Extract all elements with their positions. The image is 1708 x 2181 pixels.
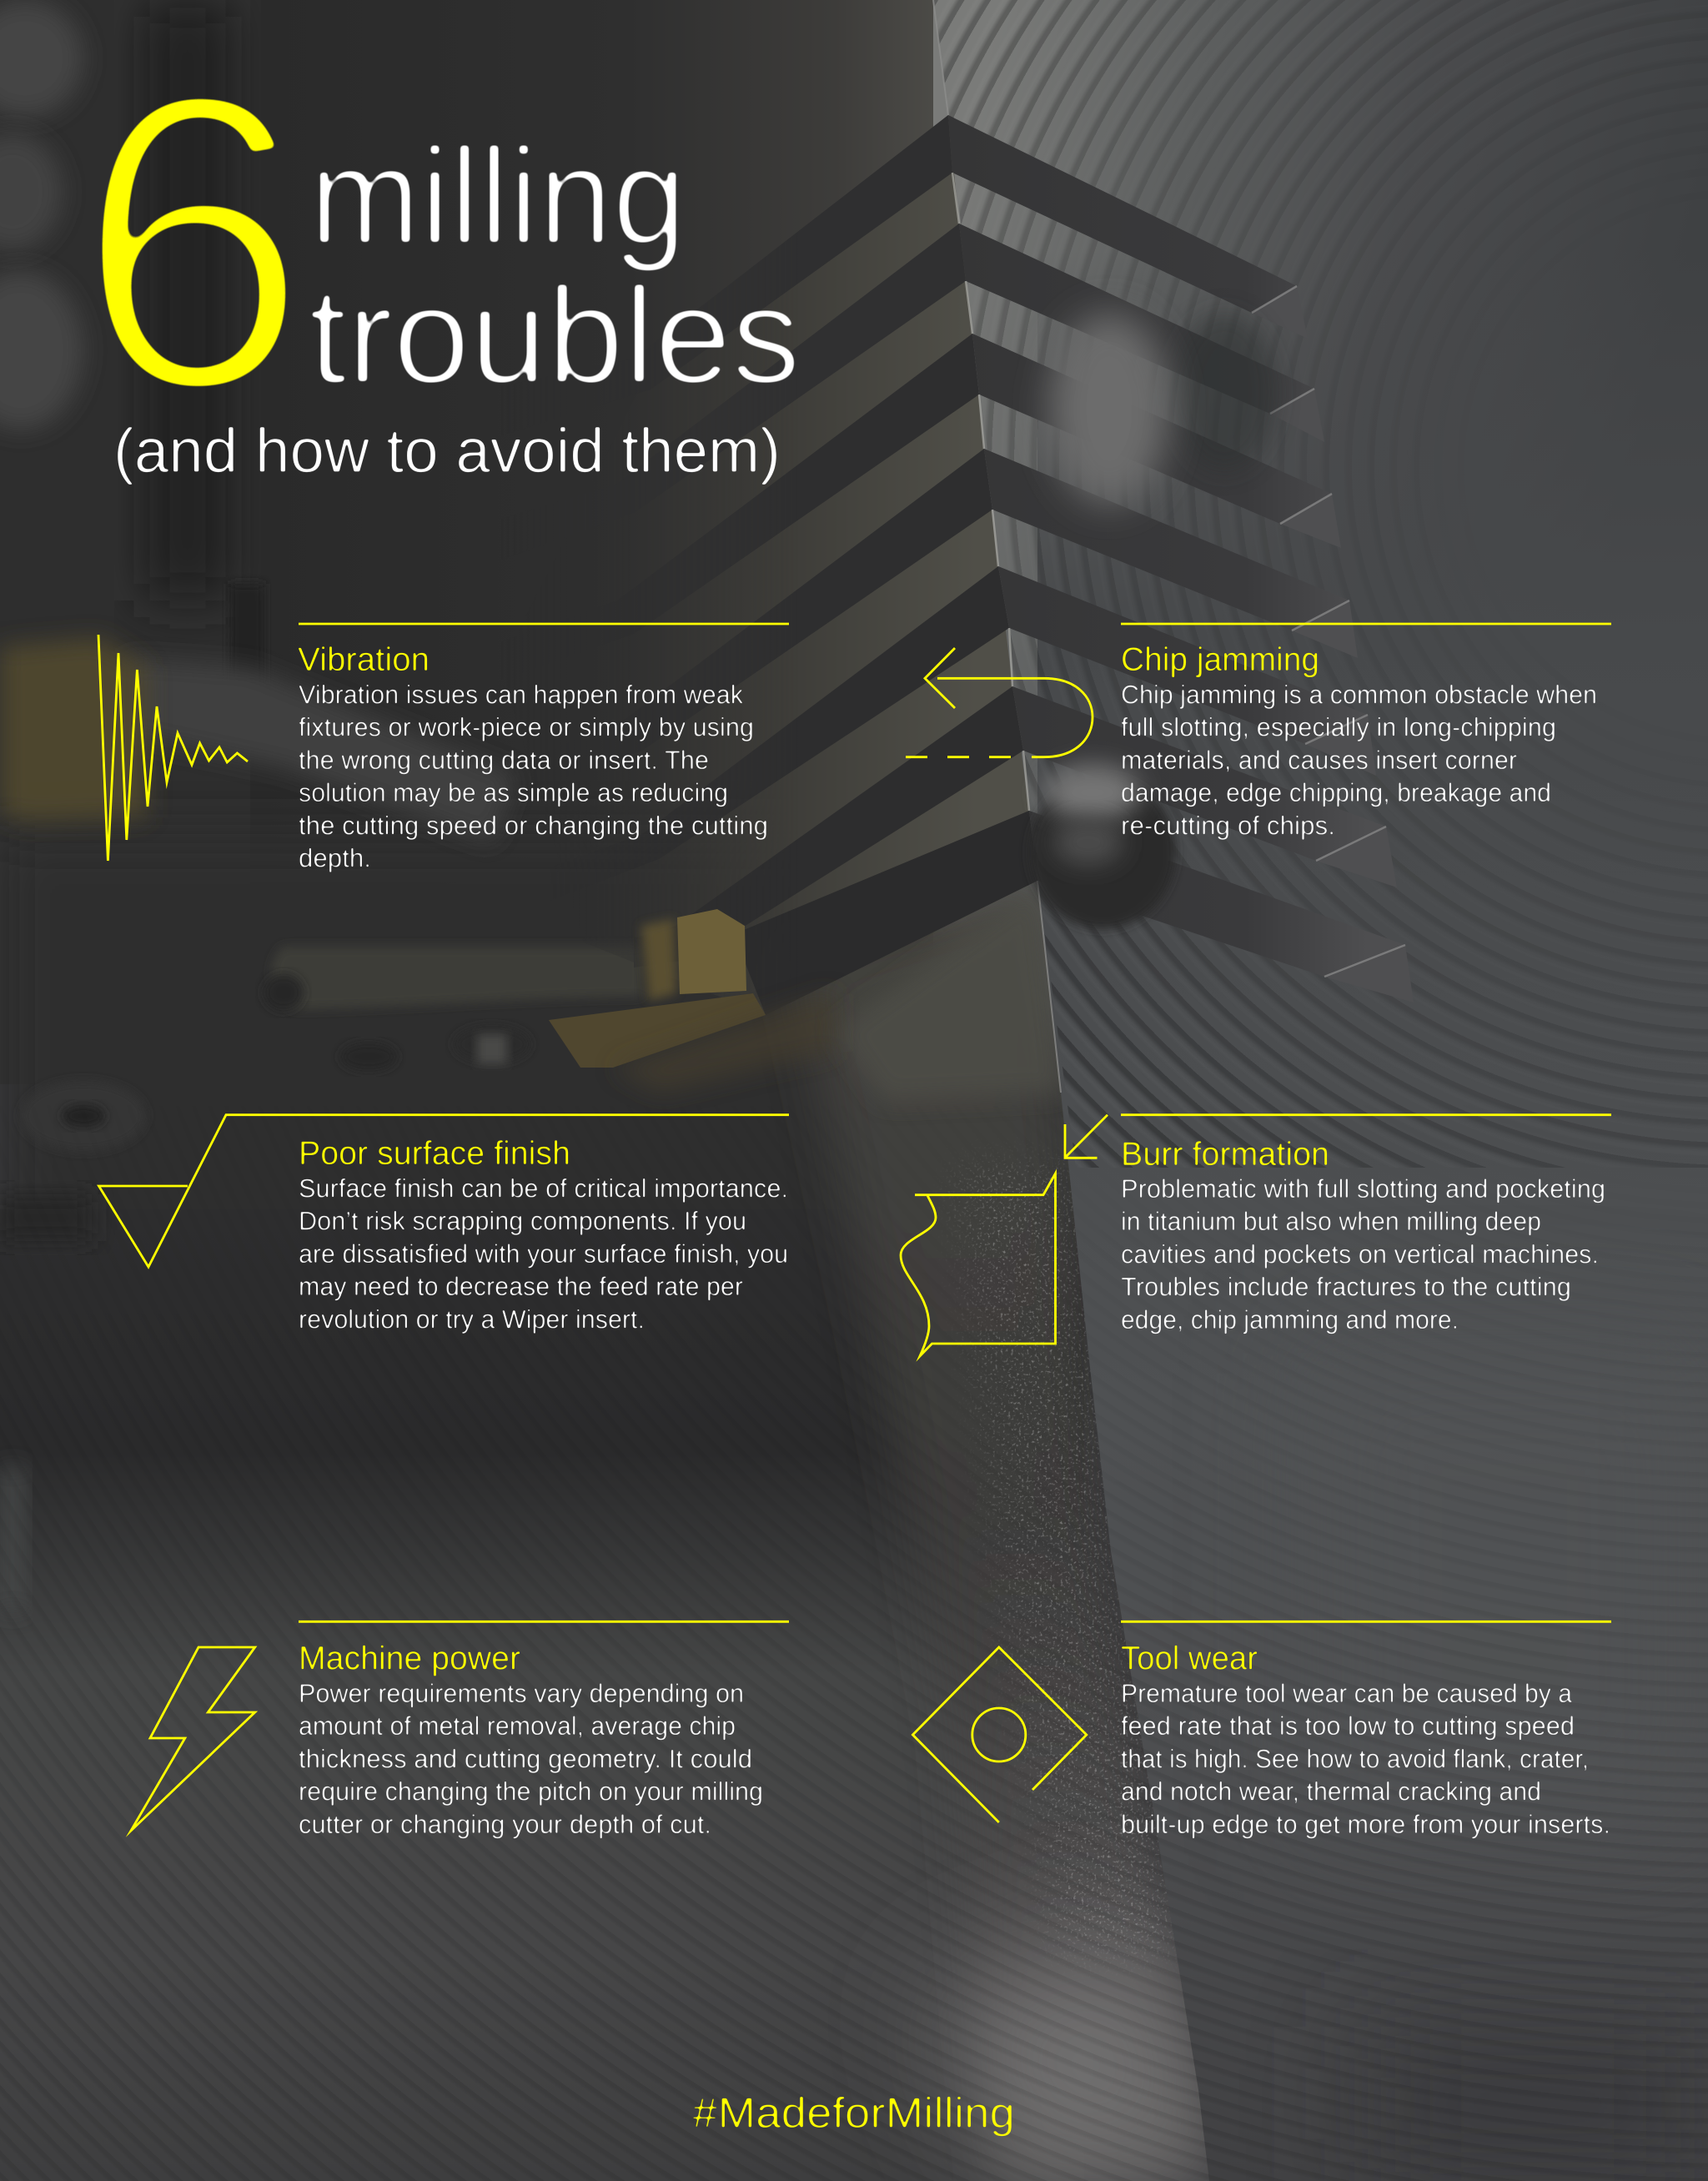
rule <box>1121 1113 1611 1116</box>
heading: Vibration <box>298 641 430 678</box>
rule <box>1121 623 1611 625</box>
body text <box>1121 679 1597 840</box>
background: lower highlight <box>934 1918 1218 2181</box>
body text: edge, chip jamming and more. <box>1121 1304 1459 1334</box>
body text: revolution or try a Wiper insert. <box>299 1304 645 1334</box>
body text: Problematic with full slotting and pocketing <box>1121 1173 1605 1204</box>
background: lower right tones <box>1301 1334 1708 2181</box>
icon: surface finish symbol with rule <box>98 1115 789 1267</box>
body text: feed rate that is too low to cutting speed <box>1121 1711 1575 1741</box>
body text <box>1121 1173 1605 1334</box>
icon: burr workpiece with arrow <box>901 1115 1108 1356</box>
background: soft machine shapes left <box>0 0 642 1610</box>
icon: chip return arrow <box>906 648 1093 757</box>
body text: the wrong cutting data or insert. The <box>299 745 709 775</box>
heading: Machine power <box>299 1641 520 1677</box>
background: tooth tip facets <box>1252 286 1414 1003</box>
title <box>75 7 801 485</box>
body text: Don’t risk scrapping components. If you <box>299 1206 746 1236</box>
background: metal strip left of the blade edge <box>792 881 1209 2181</box>
body text: Power requirements vary depending on <box>299 1678 744 1708</box>
body text: Premature tool wear can be caused by a <box>1121 1678 1572 1708</box>
body text: fixtures or work-piece or simply by using <box>299 712 754 742</box>
body text: Surface finish can be of critical importance. <box>299 1173 788 1203</box>
body text: amount of metal removal, average chip <box>299 1711 736 1741</box>
panel: vibration <box>98 624 789 872</box>
body text <box>299 1678 763 1839</box>
rule <box>299 623 789 625</box>
panel: machine power <box>131 1621 789 1839</box>
panel: poor surface finish <box>98 1115 789 1334</box>
body text <box>299 679 768 872</box>
title word milling: milling <box>309 119 686 273</box>
background: blurred bolts <box>1029 313 1276 929</box>
panel: tool wear <box>912 1621 1611 1839</box>
body text: require changing the pitch on your milling <box>299 1776 763 1807</box>
body text: are dissatisfied with your surface finish, you <box>299 1239 788 1269</box>
body text: Vibration issues can happen from weak <box>299 679 743 709</box>
body text: full slotting, especially in long-chipping <box>1121 712 1556 742</box>
icon: worn insert <box>912 1647 1087 1822</box>
body text: built-up edge to get more from your inserts. <box>1121 1809 1610 1839</box>
body text <box>299 1173 788 1334</box>
heading: Chip jamming <box>1121 641 1319 678</box>
panel: chip jamming <box>906 624 1611 840</box>
body text: cavities and pockets on vertical machines. <box>1121 1239 1599 1269</box>
hashtag footer: #MadeforMilling <box>692 2089 1015 2138</box>
title numeral 6: 6 <box>75 7 309 478</box>
rule <box>1121 1621 1611 1623</box>
background: lit blade face under the last tooth <box>834 884 1063 1101</box>
body text: depth. <box>299 842 371 872</box>
body text: solution may be as simple as reducing <box>299 777 728 807</box>
icon: lightning bolt <box>131 1647 255 1831</box>
heading: Tool wear <box>1121 1641 1258 1677</box>
body text: materials, and causes insert corner <box>1121 745 1517 775</box>
background: gold inserts <box>549 909 834 1093</box>
background: surface right of the blade edge <box>1037 250 1708 2181</box>
panel: burr formation <box>901 1115 1611 1356</box>
subtitle: (and how to avoid them) <box>113 415 781 485</box>
background: tooth edge highlights <box>933 0 1405 1093</box>
icon: vibration waveform <box>98 635 248 861</box>
body text: thickness and cutting geometry. It could <box>299 1743 752 1773</box>
body text: the cutting speed or changing the cutting <box>299 810 768 840</box>
body text: in titanium but also when milling deep <box>1121 1206 1541 1236</box>
body text: Chip jamming is a common obstacle when <box>1121 679 1597 709</box>
body text: re-cutting of chips. <box>1121 810 1335 840</box>
body text: damage, edge chipping, breakage and <box>1121 777 1551 807</box>
heading: Burr formation <box>1121 1136 1329 1173</box>
background: left wings of the cutter <box>714 115 1037 1009</box>
background: speckled metal grain <box>959 1168 1176 1952</box>
body text: may need to decrease the feed rate per <box>299 1271 743 1301</box>
body text: cutter or changing your depth of cut. <box>299 1809 711 1839</box>
heading: Poor surface finish <box>299 1135 570 1172</box>
body text: Troubles include fractures to the cutting <box>1121 1272 1571 1302</box>
title word troubles: troubles <box>309 259 801 412</box>
body text <box>1121 1678 1610 1839</box>
rule <box>299 1621 789 1623</box>
background: right teeth bands <box>948 115 1405 977</box>
body text: and notch wear, thermal cracking and <box>1121 1776 1541 1807</box>
body text: that is high. See how to avoid flank, crater, <box>1121 1743 1589 1773</box>
